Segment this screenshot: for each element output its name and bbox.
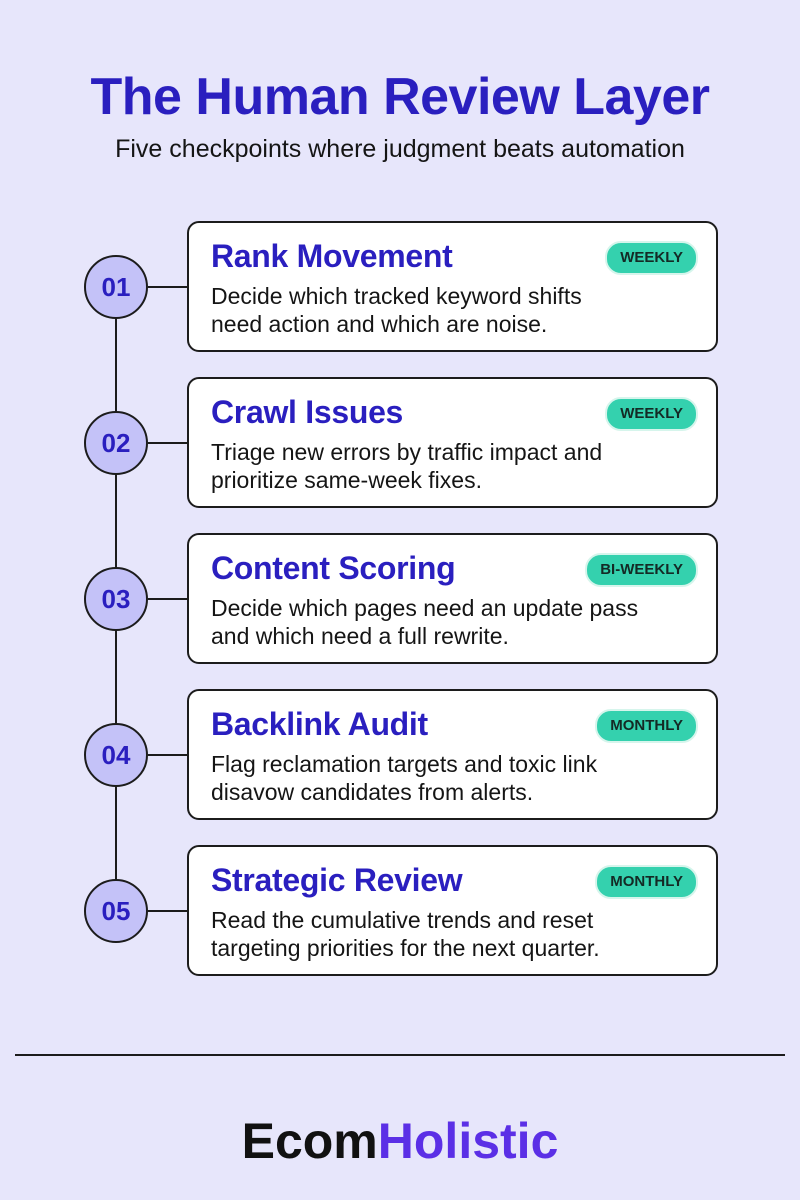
logo: EcomHolistic <box>242 1113 558 1169</box>
card: Crawl Issues <box>187 377 718 508</box>
card: Strategic Review: Read the cumulative trends and reset <box>211 907 593 933</box>
card: Backlink Audit: MONTHLY <box>610 717 683 734</box>
card: Rank Movement: WEEKLY <box>620 249 683 266</box>
card: Content Scoring <box>187 533 718 664</box>
circle 05: 05 <box>102 896 130 926</box>
card: Strategic Review: Strategic Review <box>211 862 462 898</box>
card: Rank Movement: need action and which are noise. <box>211 311 547 337</box>
circle 02 <box>84 411 148 475</box>
circle 03: 03 <box>102 584 130 614</box>
card: Rank Movement: Rank Movement <box>211 238 452 274</box>
timeline line <box>115 287 117 911</box>
circle 03 <box>84 567 148 631</box>
step 01 <box>84 221 718 352</box>
card: Rank Movement <box>187 221 718 352</box>
card: Crawl Issues: prioritize same-week fixes. <box>211 467 482 493</box>
card: Backlink Audit <box>187 689 718 820</box>
circle 02: 02 <box>102 428 130 458</box>
card: Backlink Audit: Backlink Audit <box>211 706 428 742</box>
title: The Human Review Layer <box>90 68 710 126</box>
circle 01: 01 <box>102 272 130 302</box>
card: Strategic Review: MONTHLY <box>610 873 683 890</box>
card: Crawl Issues: Triage new errors by traffic impact and <box>211 439 602 465</box>
card: Rank Movement: Decide which tracked keyword shifts <box>211 283 582 309</box>
step 02 <box>84 377 718 508</box>
subtitle: Five checkpoints where judgment beats automation <box>115 135 685 163</box>
card: Content Scoring: BI-WEEKLY <box>600 561 683 578</box>
step 05 <box>84 845 718 976</box>
card: Backlink Audit: disavow candidates from alerts. <box>211 779 533 805</box>
circle 04 <box>84 723 148 787</box>
card: Content Scoring: and which need a full rewrite. <box>211 623 509 649</box>
card: Content Scoring: Decide which pages need an update pass <box>211 595 638 621</box>
card: Strategic Review: targeting priorities for the next quarter. <box>211 935 600 961</box>
card: Backlink Audit: Flag reclamation targets and toxic link <box>211 751 597 777</box>
circle 05 <box>84 879 148 943</box>
circle 01 <box>84 255 148 319</box>
circle 04: 04 <box>102 740 130 770</box>
step 03 <box>84 533 718 664</box>
step 04 <box>84 689 718 820</box>
card: Crawl Issues: WEEKLY <box>620 405 683 422</box>
card: Crawl Issues: Crawl Issues <box>211 394 403 430</box>
card: Strategic Review <box>187 845 718 976</box>
card: Content Scoring: Content Scoring <box>211 550 455 586</box>
